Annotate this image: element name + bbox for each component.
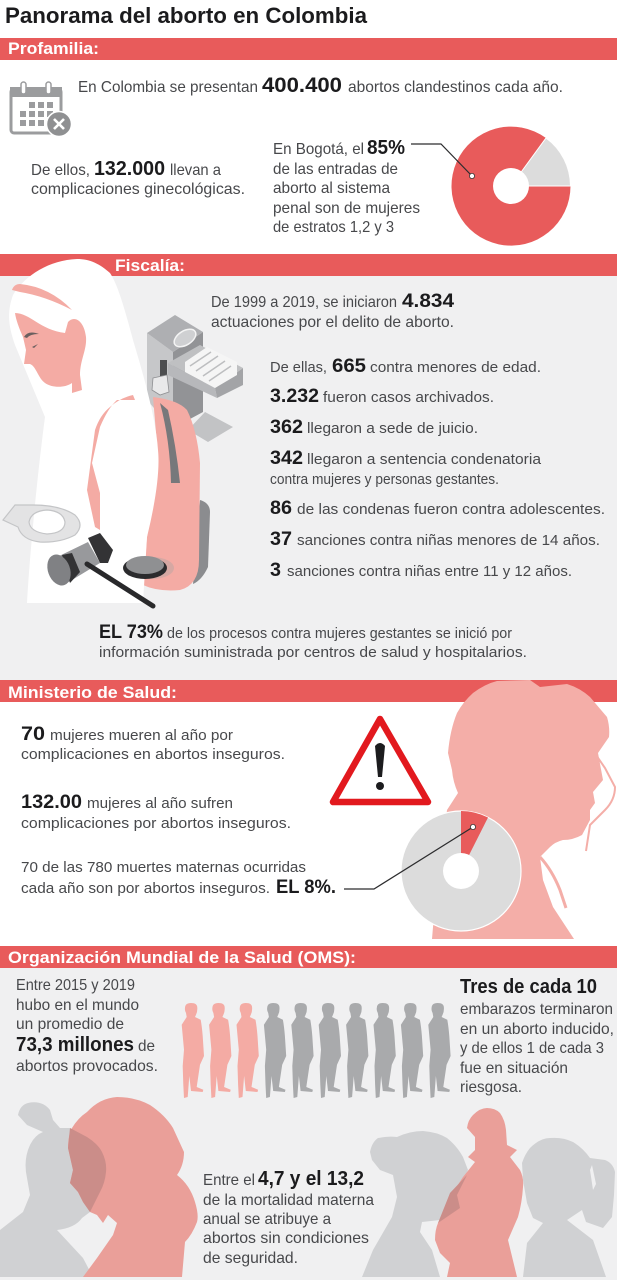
stat: 665: [270, 356, 541, 377]
illustration: handcuffs: [3, 505, 80, 542]
text: 132.00 mujeres: [21, 792, 291, 832]
face and neck: [15, 313, 86, 393]
heading bar: Ministerio de Salud: Ministerio de Salud:: [8, 683, 177, 702]
stat: 342: llegaron a sentencia condenatoria: [307, 451, 542, 468]
stat: 3.232: [270, 386, 494, 407]
text: 73,3 millones: hubo en el mundo: [16, 997, 139, 1014]
stat: 665: contra menores de edad.: [370, 359, 541, 376]
text: 70 de las 780: [21, 859, 336, 898]
callout: EL 73%: información suministrada por centros de salud y hospitalarios.: [99, 644, 527, 661]
text: 73,3 millones: de: [138, 1038, 155, 1055]
callout: EL 73%: EL 73%: [99, 622, 163, 643]
icon: calendar with cross: [10, 82, 72, 136]
heading bar: OMS: Organización Mundial de la Salud (OMS):: [8, 948, 356, 967]
illustration: file cabinet: [147, 315, 243, 442]
illustration: woman silhouette in white: [9, 259, 159, 603]
heading bar: Fiscalía: Fiscalía:: [115, 256, 185, 275]
text: Tres de cada 10: y de ellos 1 de cada 3: [460, 1040, 604, 1057]
text: Bogotá 85%: de estratos 1,2 y 3: [273, 219, 394, 236]
text: 132.000 complicaciones: 132.000: [94, 158, 165, 180]
text: 400.400 abortos: En Colombia se presentan: [78, 79, 258, 96]
text: 73,3 millones: Entre 2015 y 2019: [16, 977, 135, 994]
callout: EL 73%: [99, 622, 527, 661]
heading bar: Ministerio de Salud: [0, 680, 617, 702]
text: 4.834 actuaciones: 4.834: [402, 291, 454, 312]
text: 132.00 mujeres: 132.00: [21, 792, 82, 813]
text: 4,7 y el 13,2: de seguridad.: [203, 1250, 298, 1267]
text: 4.834 actuaciones: [211, 291, 454, 331]
headband: [12, 284, 72, 310]
pictogram: 3 of 10 women: [182, 1003, 451, 1098]
illustration: right silhouettes: [362, 1108, 615, 1277]
text: Bogotá 85%: En Bogotá, el: [273, 141, 364, 158]
text: 132.00 mujeres: mujeres al año sufren: [87, 795, 233, 812]
text: 73,3 millones: abortos provocados.: [16, 1058, 158, 1075]
text: Bogotá 85%: 85%: [367, 137, 405, 159]
text: 73,3 millones: 73,3 millones: [16, 1034, 134, 1056]
text: Bogotá 85%: penal son de mujeres: [273, 200, 420, 217]
text: Tres de cada 10: en un aborto inducido,: [460, 1021, 614, 1038]
stat: 86: 86: [270, 498, 292, 519]
text: 70 mujeres: complicaciones en abortos inseguros.: [21, 746, 285, 763]
text: Tres de cada 10: [460, 976, 614, 1096]
stat: 342: contra mujeres y personas gestantes.: [270, 471, 499, 488]
illustration: woman profile silhouette: [432, 680, 615, 939]
donut chart: 85%: [411, 127, 571, 246]
donut chart: 8%: [344, 811, 521, 931]
text: 70 de las 780: 70 de las 780 muertes maternas ocurridas: [21, 859, 306, 876]
text: 73,3 millones: [16, 977, 158, 1075]
text: Tres de cada 10: embarazos terminaron: [460, 1001, 613, 1018]
heading bar: Profamilia: Profamilia:: [8, 39, 99, 58]
stat: 665: 665: [332, 356, 366, 377]
text: 70 mujeres: [21, 724, 285, 763]
text: 132.000 complicaciones: llevan a: [170, 162, 221, 179]
text: 4,7 y el 13,2: 4,7 y el 13,2: [258, 1168, 364, 1190]
text: 73,3 millones: un promedio de: [16, 1016, 124, 1033]
title: Panorama del aborto en Colombia: [5, 3, 368, 28]
text: 4.834 actuaciones: actuaciones por el delito de aborto.: [211, 314, 454, 331]
illustration: backpack: [193, 500, 210, 584]
stat: 86: de las condenas fueron contra adolescentes.: [297, 501, 605, 518]
text: 400.400 abortos: abortos clandestinos cada año.: [348, 79, 563, 96]
panel: Ministerio de Salud: [0, 680, 617, 939]
text: 70 de las 780: cada año son por abortos inseguros.: [21, 880, 270, 897]
text: 4.834 actuaciones: De 1999 a 2019, se iniciaron: [211, 294, 397, 311]
text: 400.400 abortos: [78, 74, 563, 97]
text: Tres de cada 10: riesgosa.: [460, 1079, 522, 1096]
text: 4,7 y el 13,2: [203, 1168, 374, 1267]
stat: 3: sanciones contra niñas entre 11 y 12 años.: [287, 563, 572, 580]
panel: Organización Mundial de la Salud: [0, 946, 617, 1280]
arm outline: [87, 395, 135, 530]
heading bar: Profamilia: [0, 38, 617, 60]
stat: 362: llegaron a sede de juicio.: [307, 420, 478, 437]
text: Bogotá 85%: aborto al sistema: [273, 180, 390, 197]
text: 4,7 y el 13,2: Entre el: [203, 1172, 255, 1189]
text: 132.000 complicaciones: complicaciones ginecológicas.: [31, 181, 245, 198]
eye and brow: [24, 333, 39, 348]
text: 70 mujeres: 70: [21, 724, 45, 745]
text: Bogotá 85%: [273, 137, 420, 236]
stat: 362: [270, 417, 478, 438]
heading bar: Fiscalía: [0, 254, 617, 276]
text: 70 de las 780: EL 8%.: [276, 877, 336, 898]
panel: Fiscalía: [0, 254, 617, 680]
stat: 342: 342: [270, 448, 303, 469]
text: Tres de cada 10: fue en situación: [460, 1060, 568, 1077]
text: Bogotá 85%: de las entradas de: [273, 161, 398, 178]
stat: 37: 37: [270, 529, 292, 550]
text: 4,7 y el 13,2: anual se atribuye a: [203, 1211, 331, 1228]
text: 132.000 complicaciones: [31, 158, 245, 198]
illustration: left silhouettes: [0, 1097, 198, 1277]
stat: 342: [270, 448, 542, 488]
illustration: pink body: [143, 397, 200, 590]
text: 70 mujeres: mujeres mueren al año por: [50, 727, 233, 744]
illustration: gavel: [43, 533, 153, 606]
text: 4,7 y el 13,2: abortos sin condiciones: [203, 1230, 369, 1247]
callout: EL 73%: de los procesos contra mujeres gestantes se inició por: [167, 625, 512, 642]
text: 132.000 complicaciones: De ellos,: [31, 162, 90, 179]
text: 400.400 abortos: 400.400: [262, 74, 342, 97]
text: 4,7 y el 13,2: de la mortalidad materna: [203, 1192, 374, 1209]
panel: Profamilia: [0, 38, 617, 246]
stat: 3.232: 3.232: [270, 386, 319, 407]
text: 132.00 mujeres: complicaciones por abortos inseguros.: [21, 815, 291, 832]
icon: warning triangle: [333, 719, 428, 802]
stat: 3: 3: [270, 560, 281, 581]
text: Tres de cada 10: Tres de cada 10: [460, 976, 597, 998]
illustration: sound block: [123, 556, 174, 579]
stat: 3.232: fueron casos archivados.: [323, 389, 494, 406]
stat: 37: sanciones contra niñas menores de 14 años.: [297, 532, 600, 549]
stat: 665: De ellas,: [270, 359, 327, 376]
heading bar: OMS: [0, 946, 617, 968]
stat: 362: 362: [270, 417, 303, 438]
